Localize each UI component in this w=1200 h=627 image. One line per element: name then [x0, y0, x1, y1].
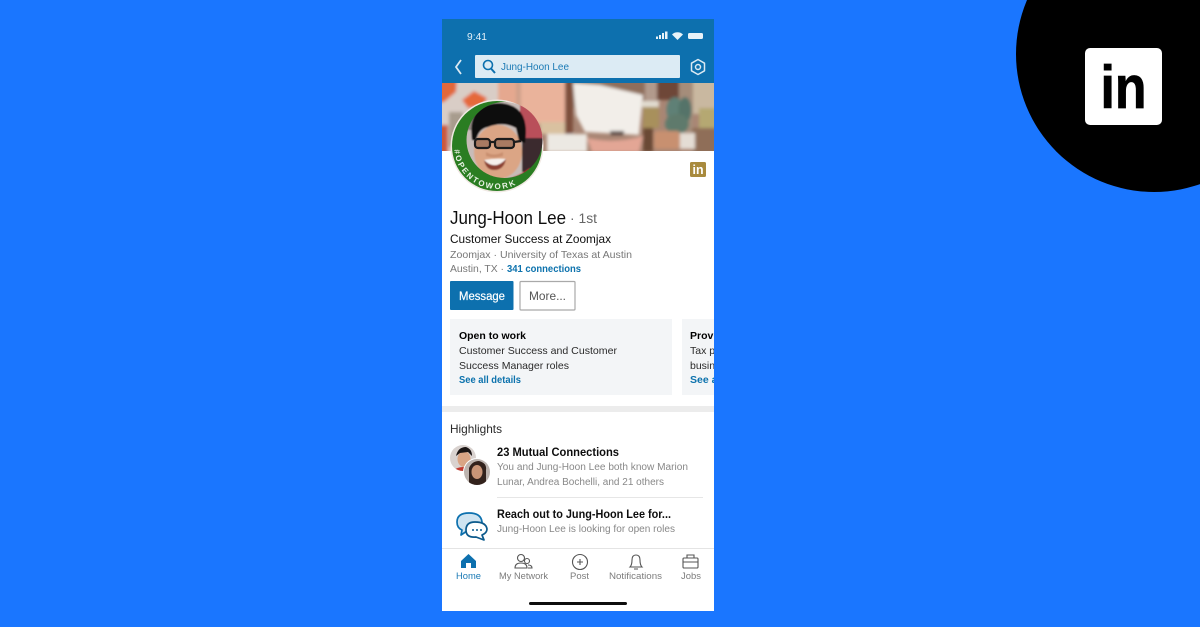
profile name and details: Austin, TX ·: [450, 263, 504, 275]
tab: jobs: [681, 555, 702, 581]
reach out text: Jung-Hoon Lee is looking for open roles: [497, 524, 675, 535]
profile name and details: Customer Success at Zoomjax: [450, 232, 611, 246]
profile name and details: 341 connections: [507, 263, 581, 275]
icon: LinkedIn logo: [1085, 48, 1162, 125]
reach out text: Reach out to Jung-Hoon Lee for...: [497, 509, 671, 521]
card: open to work: See all details: [459, 374, 521, 386]
icon: mutual connection avatars: [450, 445, 491, 486]
ring label: #OPENTOWORK: [454, 150, 516, 190]
tab: home: [456, 554, 480, 579]
avatar with #OPENTOWORK ring: [450, 100, 544, 192]
profile name and details: · 1st: [570, 211, 597, 226]
icon: gold LinkedIn badge: [690, 162, 706, 177]
card: open to work: Open to work: [459, 330, 526, 342]
avatar photo: [466, 102, 542, 178]
icon: back chevron: [456, 60, 461, 74]
profile name and details: Zoomjax · University of Texas at Austin: [450, 249, 632, 261]
corner black circle with LinkedIn logo: [1016, 0, 1200, 192]
tab: home: Home: [456, 571, 481, 581]
tab: my network: [499, 554, 549, 581]
card: open to work: Success Manager roles: [459, 360, 569, 372]
mutual connections text: Lunar, Andrea Bochelli, and 21 others: [497, 477, 664, 488]
message button: [450, 281, 514, 310]
more button: More...: [529, 291, 566, 303]
card: providing services (cropped): busin: [690, 360, 715, 372]
profile name and details: Jung-Hoon Lee: [450, 208, 566, 228]
profile name and details: [450, 208, 632, 275]
icon: LinkedIn logo: in: [1100, 54, 1146, 121]
app header bar: [442, 19, 714, 83]
highlights section: [450, 422, 703, 540]
status bar icons: [656, 32, 703, 40]
card: providing services (cropped): See a: [690, 374, 718, 386]
mutual connections text: You and Jung-Hoon Lee both know Marion: [497, 462, 688, 473]
tab: notifications: Notifications: [609, 571, 663, 581]
highlights heading: Highlights: [450, 422, 502, 436]
phone mockup: [442, 19, 714, 611]
card: providing services (cropped): Provi: [690, 330, 716, 342]
card: open to work: Customer Success and Customer: [459, 345, 617, 357]
icon: settings gear: [692, 60, 704, 74]
tab: jobs: Jobs: [681, 571, 702, 581]
tab: post: [570, 554, 589, 579]
search box: [475, 55, 680, 78]
message button: Message: [459, 291, 505, 303]
more button: [520, 282, 575, 310]
icon: gold LinkedIn badge: in: [692, 163, 704, 177]
reach out text: [497, 509, 675, 535]
tab: my network: My Network: [499, 571, 549, 581]
card: providing services (cropped): Tax p: [690, 345, 715, 357]
icon: chat bubbles: [457, 513, 487, 540]
mutual connections text: [497, 447, 688, 488]
tab: notifications: [609, 555, 663, 581]
search box: Jung-Hoon Lee: [501, 62, 569, 73]
bottom tab bar: [442, 548, 714, 581]
card: providing services (cropped): [682, 319, 714, 395]
card: open to work: [450, 319, 672, 395]
mutual connections text: 23 Mutual Connections: [497, 447, 619, 459]
tab: post: Post: [570, 571, 590, 581]
home indicator: [529, 602, 627, 605]
status bar time: 9:41: [467, 32, 487, 43]
banner photo: [442, 83, 714, 151]
